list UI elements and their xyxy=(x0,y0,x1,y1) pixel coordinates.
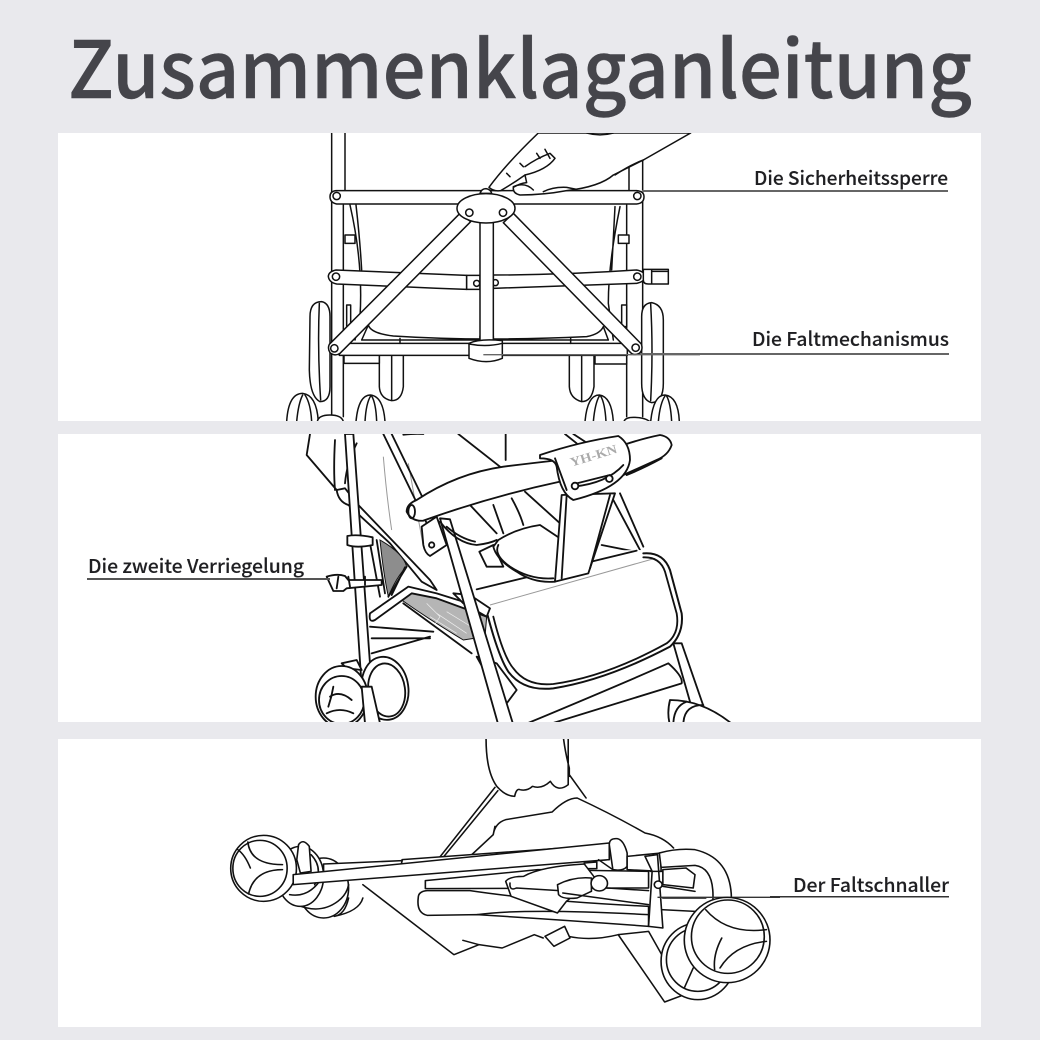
callout: safety lock: Die Sicherheitssperre xyxy=(754,163,948,191)
panel: safety lock and folding mechanism xyxy=(58,133,981,422)
panel: second lock xyxy=(58,434,981,727)
callout: folding buckle: Der Faltschnaller xyxy=(793,870,949,898)
illustration: stroller three-quarter view xyxy=(290,434,733,727)
illustration: stroller three-quarter view: YH-KN xyxy=(568,442,619,470)
title: Zusammenklaganleitung xyxy=(68,6,972,121)
callout: folding mechanism: Die Faltmechanismus xyxy=(752,324,949,352)
illustration: stroller front view with hand xyxy=(287,133,700,422)
illustration: folded stroller carried by hand xyxy=(231,739,780,1002)
panel: folding buckle xyxy=(58,739,981,1027)
callout: second lock: Die zweite Verriegelung xyxy=(88,551,304,579)
